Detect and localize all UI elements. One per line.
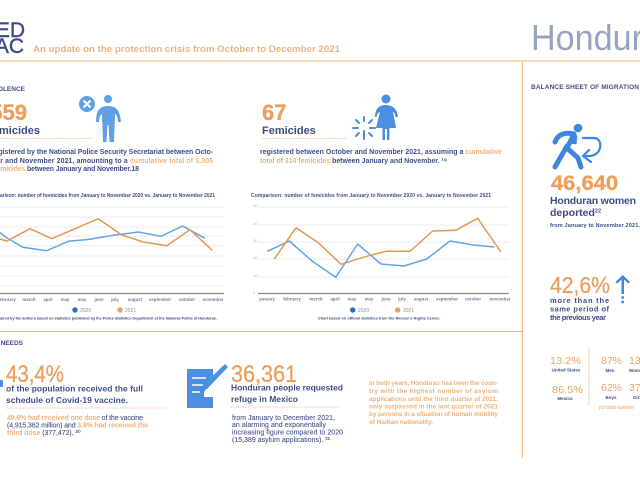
month labels: april bbox=[330, 296, 340, 302]
month labels: july bbox=[397, 296, 406, 302]
femicides text: registered between October and November 2021, assuming a cumulative bbox=[260, 149, 502, 156]
vaccine number: 43,4% bbox=[6, 361, 64, 388]
vaccine label: schedule of Covid-19 vaccine. bbox=[6, 395, 128, 405]
month labels: july bbox=[110, 297, 119, 302]
month labels: november bbox=[203, 297, 224, 302]
stats: destinations: Mexico bbox=[557, 396, 573, 401]
month labels: april bbox=[43, 297, 53, 302]
stats: destinations: 86.5% bbox=[552, 384, 583, 396]
month labels bbox=[258, 296, 511, 302]
panel: femicides bbox=[260, 94, 502, 165]
month labels: may bbox=[365, 296, 374, 302]
series 2021 bbox=[274, 218, 501, 264]
month labels: may bbox=[348, 296, 357, 302]
month labels: june bbox=[380, 296, 391, 302]
deported label: Honduran women bbox=[550, 195, 636, 207]
chart: femicides: 10 bbox=[253, 273, 258, 278]
legend: 2021 bbox=[125, 308, 136, 314]
deported period: from January to November 2021. bbox=[550, 223, 640, 229]
femicides number: 67 bbox=[262, 100, 286, 125]
deported label: 22 bbox=[595, 208, 601, 214]
heading: needs: NEEDS bbox=[1, 340, 24, 347]
vaccine text: 49.6% had received one dose of the vaccine bbox=[7, 415, 143, 422]
asylum text bbox=[232, 415, 343, 444]
vaccine text: (4,915,362 million) and 3.8% had received the bbox=[7, 422, 148, 430]
icon: woman with burst bbox=[353, 94, 398, 140]
legend bbox=[72, 307, 136, 314]
month labels: march bbox=[22, 297, 36, 302]
chart title: Comparison: number of femicides from January to November 2020 vs. January to November 2021 bbox=[251, 193, 491, 199]
stats: destinations: United States bbox=[552, 368, 581, 372]
asylum label bbox=[231, 382, 343, 404]
month labels: october bbox=[179, 297, 195, 302]
callout: asylum note: In both years, Honduras has been the coun- bbox=[369, 380, 498, 387]
femicides text: total of 314 femicides between January and November. ¹⁹ bbox=[260, 158, 447, 165]
chart: femicides: 40 bbox=[253, 221, 258, 226]
callout: asylum note bbox=[369, 380, 498, 426]
month labels: march bbox=[309, 296, 323, 302]
icon: man with x bbox=[79, 95, 121, 142]
deported number: 46,640 bbox=[551, 172, 618, 195]
month labels: may bbox=[61, 297, 70, 302]
chart: homicides bbox=[0, 193, 224, 320]
logo bbox=[0, 19, 25, 58]
month labels: september bbox=[149, 297, 171, 302]
stats: gender: (of total number bbox=[599, 405, 634, 411]
asylum label: refuge in Mexico bbox=[231, 394, 298, 404]
series 2020 bbox=[0, 226, 205, 251]
series 2021 bbox=[0, 219, 212, 250]
chart: femicides bbox=[251, 193, 511, 320]
asylum number: 36,361 bbox=[231, 361, 297, 388]
chart: femicides: 20 bbox=[253, 255, 258, 260]
legend: 2020 bbox=[80, 308, 91, 314]
subtitle: An update on the protection crisis from October to December 2021 bbox=[33, 44, 341, 55]
month labels: february bbox=[283, 296, 301, 302]
increase number: 42,6% bbox=[550, 272, 610, 298]
month labels: august bbox=[128, 297, 143, 302]
month labels: june bbox=[93, 297, 104, 302]
stats: destinations bbox=[550, 355, 583, 401]
month labels bbox=[0, 297, 224, 302]
asylum text: an alarming and exponentially bbox=[232, 422, 327, 429]
panel: migration balance bbox=[531, 84, 640, 411]
icon: up arrow bbox=[616, 275, 630, 303]
icon: partial bbox=[0, 380, 3, 387]
series 2020 bbox=[267, 241, 494, 277]
stats: gender: Men bbox=[606, 368, 615, 373]
callout: asylum note: only surpassed in the last quarter of 2021 bbox=[369, 404, 498, 410]
vaccine label: of the population received the full bbox=[6, 384, 143, 394]
legend: 2021 bbox=[403, 308, 414, 314]
deported label: deported bbox=[550, 207, 595, 219]
vaccine text: third dose (377,472). ²⁰ bbox=[7, 429, 81, 437]
stats: destinations: 13.2% bbox=[550, 355, 581, 367]
month labels: august bbox=[414, 296, 429, 302]
increase label: more than the bbox=[550, 296, 609, 305]
stats: gender: 62% bbox=[601, 382, 622, 394]
femicides text bbox=[260, 149, 502, 165]
asylum label: Honduran people requested bbox=[231, 382, 343, 392]
chart: femicides: 50 bbox=[253, 203, 258, 208]
icon: deported person bbox=[555, 124, 600, 167]
month labels: november bbox=[490, 296, 511, 302]
month labels: january bbox=[258, 296, 275, 302]
month labels: september bbox=[436, 296, 458, 302]
legend bbox=[350, 307, 414, 314]
callout: asylum note: of Haitian nationality. bbox=[369, 419, 433, 426]
femicides label: Femicides bbox=[262, 125, 316, 137]
icon: document and pen bbox=[187, 364, 228, 408]
heading: migration: BALANCE SHEET OF MIGRATION bbox=[531, 84, 639, 91]
panel: asylum bbox=[187, 361, 343, 444]
vaccine text bbox=[7, 415, 148, 437]
asylum text: increasing figure compared to 2020 bbox=[232, 430, 343, 436]
stats: gender bbox=[599, 355, 640, 411]
callout: asylum note: applications until the third quarter of 2021, bbox=[369, 396, 498, 403]
callout: asylum note: by persons in a situation of human mobility bbox=[369, 411, 498, 418]
increase label: the previous year bbox=[550, 313, 606, 322]
deported label bbox=[550, 195, 636, 219]
increase label bbox=[550, 296, 610, 322]
stats: gender: 87% bbox=[601, 355, 622, 367]
panel: vaccine bbox=[0, 361, 166, 437]
chart: femicides: 0 bbox=[253, 290, 256, 295]
legend: 2020 bbox=[358, 308, 369, 314]
vaccine label bbox=[6, 384, 143, 405]
month labels: october bbox=[465, 296, 481, 302]
increase label: same period of bbox=[550, 304, 610, 314]
asylum text: (15,389 asylum applications). ²¹ bbox=[232, 437, 331, 444]
callout: asylum note: try with the highest number of asylum bbox=[369, 388, 498, 395]
month labels: may bbox=[78, 297, 87, 302]
asylum text: from January to December 2021, bbox=[232, 415, 335, 422]
homicides text bbox=[0, 149, 214, 173]
chart: femicides: 30 bbox=[253, 238, 258, 243]
chart source: Chart based on official statistics from the Women's Rights Center. bbox=[318, 316, 440, 320]
stats: gender: Boys bbox=[605, 395, 617, 400]
panel: homicides bbox=[0, 95, 214, 173]
